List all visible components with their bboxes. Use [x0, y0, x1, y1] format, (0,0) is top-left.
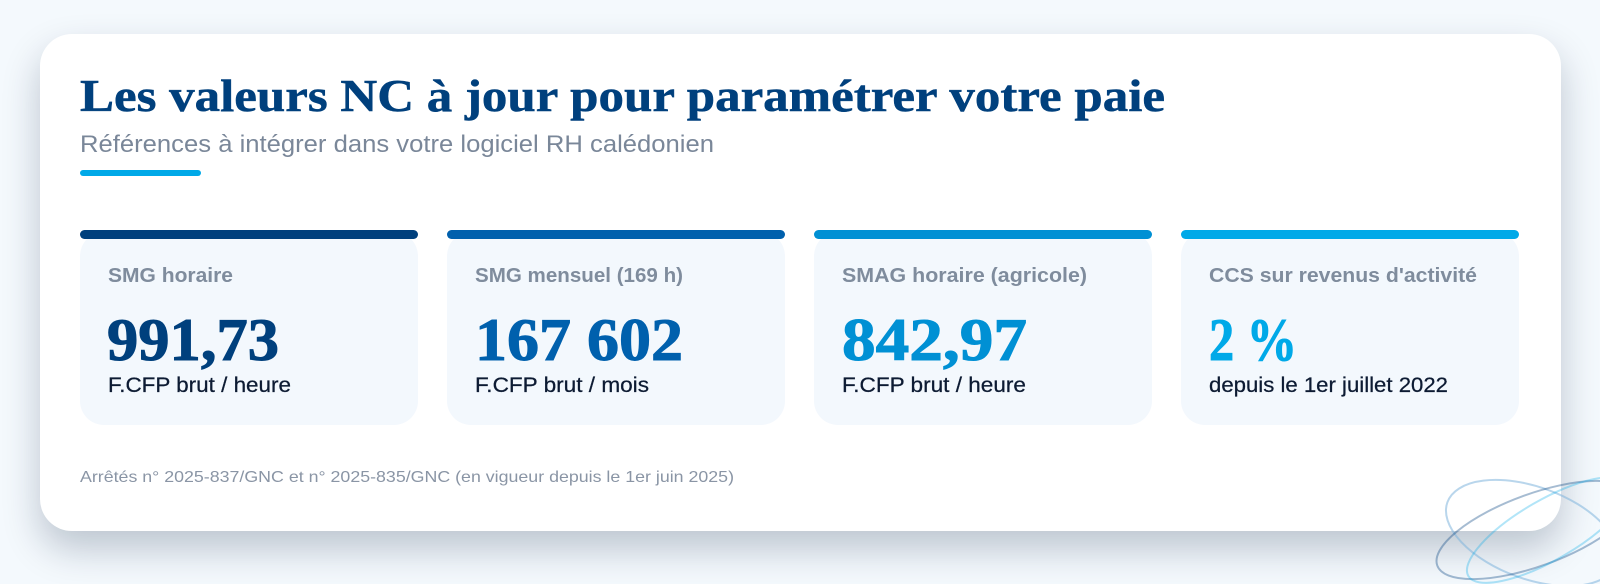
panel: CCS — [1181, 230, 1519, 425]
value: 991,73: 991,73 — [107, 307, 279, 373]
unit: F.CFP brut / heure: F.CFP brut / heure — [842, 374, 1026, 397]
unit: F.CFP brut / mois: F.CFP brut / mois — [475, 374, 649, 397]
unit: depuis le 1er juillet 2022: depuis le 1er juillet 2022 — [1209, 374, 1448, 397]
label: SMG mensuel: SMG mensuel (169 h) — [475, 265, 683, 287]
panel: SMG mensuel — [447, 230, 785, 425]
decoration: overlapping ellipses — [1425, 458, 1600, 584]
label: SMAG horaire: SMAG horaire (agricole) — [842, 265, 1087, 287]
panel: SMG horaire — [80, 230, 418, 425]
title: Les valeurs NC à jour pour paramétrer votre paie — [80, 70, 1165, 121]
subtitle: Références à intégrer dans votre logiciel RH calédonien — [80, 131, 714, 158]
accent underline — [80, 170, 201, 176]
label: SMG horaire: SMG horaire — [108, 265, 233, 287]
label: CCS: CCS sur revenus d'activité — [1209, 265, 1477, 287]
value: 842,97: 842,97 — [842, 307, 1027, 373]
unit: F.CFP brut / heure: F.CFP brut / heure — [108, 374, 291, 397]
footnote: Arrêtés n° 2025-837/GNC et n° 2025-835/GNC (en vigueur depuis le 1er juin 2025) — [80, 469, 734, 486]
panel: SMAG horaire — [814, 230, 1152, 425]
value: 2 %: 2 % — [1209, 307, 1297, 373]
value: 167 602: 167 602 — [475, 307, 683, 373]
